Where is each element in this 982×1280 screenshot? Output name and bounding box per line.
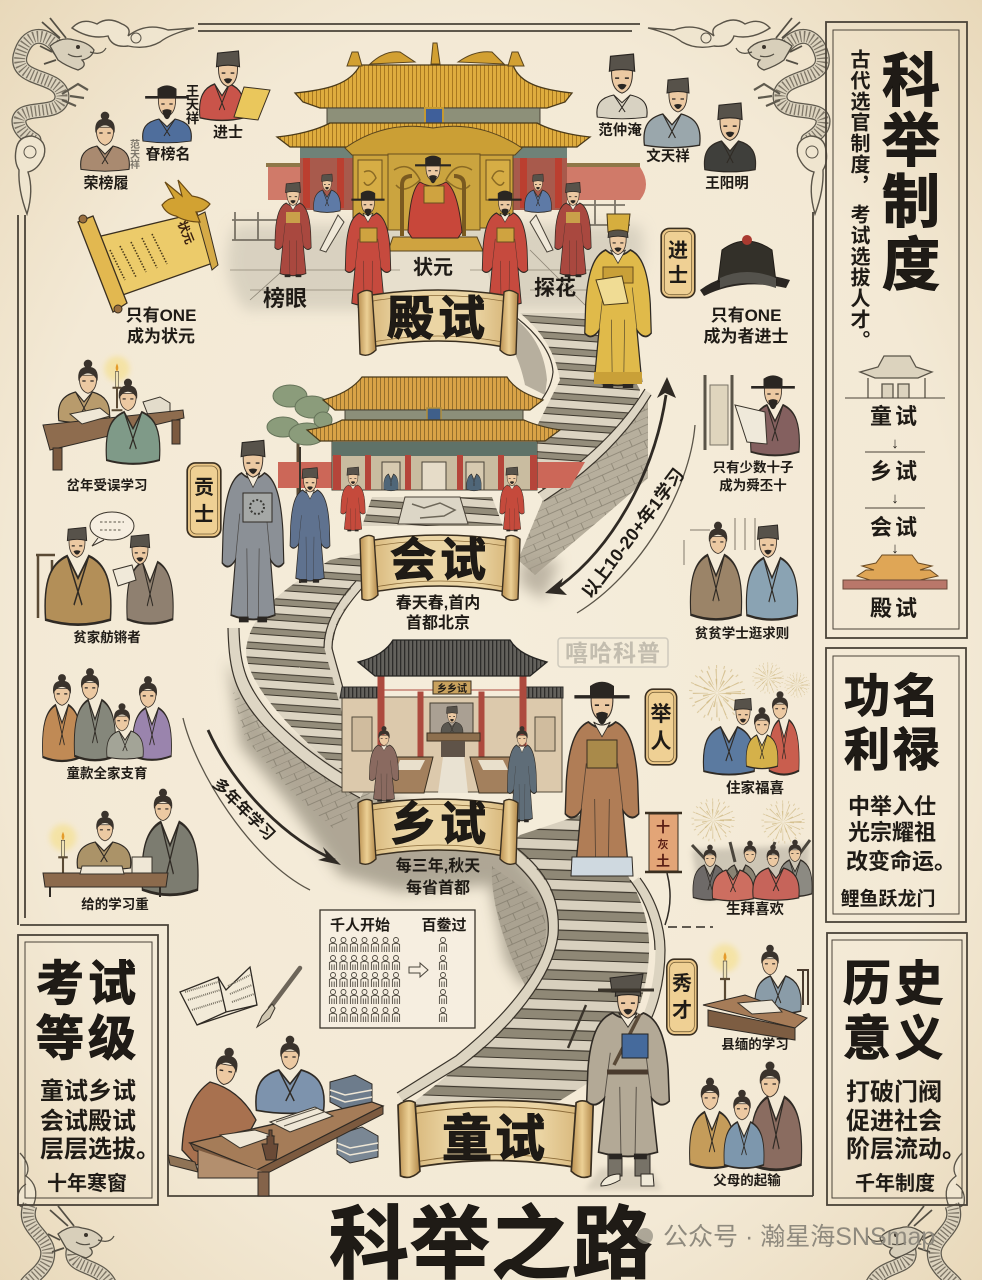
portrait: 荣榜履: 荣榜履 xyxy=(83,174,129,192)
courtyard floor xyxy=(227,225,644,310)
scroll banner: 乡试: 乡试 xyxy=(390,798,490,850)
hall labels: 榜眼 xyxy=(263,286,307,311)
red courtyard wall xyxy=(278,462,585,488)
vertical name: 范天祥: 范天祥 xyxy=(128,138,140,170)
vignette: parents with child xyxy=(690,1062,802,1188)
rank tag: 十灰土: 灰 xyxy=(658,837,668,851)
selection funnel box: 百鲞过 xyxy=(421,916,467,934)
caption: 只有ONE 成为状元: 成为状元 xyxy=(127,326,195,346)
heading: 举 xyxy=(882,109,940,174)
winding staircase with stone walls xyxy=(228,313,665,1105)
papers and ink xyxy=(220,1107,333,1148)
scroll banner: 童试 xyxy=(398,1100,593,1177)
hall labels xyxy=(263,256,576,311)
pictogram: few successful xyxy=(439,938,447,1022)
emperor xyxy=(408,156,462,238)
exam hall: 会试 xyxy=(267,377,585,531)
scroll banner: 会试: 首都北京 xyxy=(406,613,470,632)
panel: 科举制度 xyxy=(826,22,967,638)
vignette: official reading notice: 只有少数十子 xyxy=(712,459,794,475)
portrait: 进士 with document xyxy=(200,51,270,141)
panel: 功名利禄: 功名 xyxy=(844,670,942,722)
vignette: child studying with tutor xyxy=(43,789,198,912)
caption: 只有ONE 成为者进士: 成为者进士 xyxy=(704,326,788,346)
panel: 功名利禄: 中举入仕 xyxy=(848,794,936,819)
upper stairs xyxy=(520,313,640,492)
palace hall: 殿试 xyxy=(227,43,646,311)
stage flow: 殿试 xyxy=(870,596,920,621)
throne and dais xyxy=(388,237,483,251)
lower building pillars xyxy=(300,146,567,210)
panel: 历史意义: 促进社会 xyxy=(846,1108,942,1135)
middle stairs xyxy=(246,553,367,785)
vignette: family with fireworks: 住家福喜 xyxy=(726,779,784,797)
stage flow: 乡试 xyxy=(870,459,920,484)
vignette: official reading notice: 成为舜丕十 xyxy=(719,477,787,493)
vignette: parents with child: 父母的起输 xyxy=(713,1172,781,1188)
vignette: child studying with tutor: 给的学习重 xyxy=(81,896,149,912)
sign board xyxy=(433,681,471,694)
panel: 考试等级: 会试殿试 xyxy=(40,1108,136,1135)
rank tag: 十灰土: 十 xyxy=(656,819,670,835)
scroll banner: 殿试: 殿试 xyxy=(387,292,489,345)
lower roof xyxy=(277,123,590,147)
balustrades xyxy=(232,200,630,240)
rank tag: 进士 xyxy=(661,228,695,298)
exam hall: 乡试 xyxy=(340,640,563,822)
scroll banner: 会试: 春天春,首内 xyxy=(396,593,480,612)
rank tag: 举人: 人 xyxy=(650,730,672,753)
watermark: 公众号: 公众号 · 瀚星海SNSmap xyxy=(663,1223,935,1251)
icon: official winged hat xyxy=(700,235,790,296)
panel: 历史意义: 历史 xyxy=(843,958,947,1011)
stage flow: ↓ xyxy=(891,540,899,557)
blue plaque xyxy=(425,108,443,127)
gold hall icon xyxy=(843,555,947,589)
examiner alcove xyxy=(430,703,473,734)
portrait: 眘榜名: 眘榜名 xyxy=(145,145,191,163)
scroll banner: 乡试 xyxy=(358,798,518,897)
icon: writing brush xyxy=(257,968,300,1027)
portrait: 进士 with document: 进士 xyxy=(213,124,243,141)
portraits: 范仲淹 文天祥 王阳明 xyxy=(597,54,756,192)
selection funnel box: 千人开始 xyxy=(330,917,390,934)
bench xyxy=(168,1155,198,1172)
vertical intro text xyxy=(847,49,870,351)
pictogram: many candidates xyxy=(329,938,400,1022)
vignette: seated teacher and visitor: 贫家舫锵者 xyxy=(73,629,141,645)
hall outline icon xyxy=(845,356,945,398)
gongshi official in grey xyxy=(222,440,284,622)
caption: 只有ONE 成为状元: 只有ONE xyxy=(126,306,196,325)
panel: 历史意义: 阶层流动。 xyxy=(846,1136,966,1163)
stage flow: 童试 xyxy=(870,404,920,429)
vignette: poor scholar and official: 贫贫学士逛求则 xyxy=(695,625,789,641)
soldier with spear xyxy=(290,447,330,583)
panel: 考试等级: 考试 xyxy=(36,958,140,1011)
heading: 科 xyxy=(882,49,940,114)
panel: 考试等级: 等级 xyxy=(36,1013,140,1066)
vignette: poor scholar and official xyxy=(684,518,798,641)
portrait: 眘榜名 xyxy=(143,85,191,163)
blue attendants xyxy=(314,174,551,212)
students at desk xyxy=(168,1036,383,1196)
juren official in brown xyxy=(565,682,639,876)
vignette: scholars studying at table xyxy=(43,356,184,493)
panel: 考试等级: 十年寒窗 xyxy=(47,1171,127,1195)
watermark: 嘻哈科普: 嘻哈科普 xyxy=(565,640,661,666)
rank tag: 十灰土: 土 xyxy=(656,853,670,869)
heading: 度 xyxy=(882,233,940,298)
rank tag: 贡士: 贡 xyxy=(194,477,214,499)
vignette: seated teacher and visitor xyxy=(36,512,173,645)
student in brown xyxy=(182,1046,256,1165)
gold imperial scroll with dragon xyxy=(78,180,218,313)
red guards xyxy=(341,467,524,531)
scroll banner: 会试: 会试 xyxy=(390,534,490,586)
panel: 功名利禄: 光宗耀祖 xyxy=(848,820,936,845)
scroll banner: 殿试 xyxy=(358,290,518,355)
arrow: 多年年学习: 多年年学习 xyxy=(209,774,279,844)
red pillars xyxy=(378,677,526,777)
panel: 功名利禄: 鲤鱼跃龙门 xyxy=(840,888,936,910)
candidates xyxy=(369,726,537,822)
stage flow: 会试 xyxy=(870,515,920,540)
portraits: 范仲淹 文天祥 王阳明: 文天祥 xyxy=(646,147,690,165)
exam hall: 乡试: 乡乡试 xyxy=(437,682,467,695)
rank tag: 举人 xyxy=(645,689,677,765)
rank tag: 秀才: 才 xyxy=(672,999,692,1022)
scroll banner: 乡试: 每三年,秋天 xyxy=(396,856,480,875)
side wings xyxy=(342,697,562,792)
arrow: 以上10-20+年寒学习 xyxy=(545,377,695,613)
upper roof xyxy=(323,377,543,410)
vignette: county study by candle xyxy=(703,944,808,1052)
vignette: scholars studying at table: 岔年受误学习 xyxy=(66,477,148,493)
xiucai scholar xyxy=(568,974,669,1190)
pine tree xyxy=(267,385,332,520)
rank tag: 贡士 xyxy=(187,463,221,537)
panel: 功名利禄: 利禄 xyxy=(844,724,942,776)
building base xyxy=(332,440,537,490)
hall labels: 状元 xyxy=(413,256,453,279)
candidates desks xyxy=(387,757,518,793)
portraits: 范仲淹 文天祥 王阳明: 范仲淹 xyxy=(598,122,642,139)
rank tag: 秀才 xyxy=(667,959,697,1035)
arrow: 多年年学习 xyxy=(183,718,341,890)
stage flow xyxy=(865,404,925,621)
scroll banner: 童试: 童试 xyxy=(442,1111,548,1167)
stage flow: ↓ xyxy=(891,490,899,507)
lower roof xyxy=(307,420,560,441)
student in blue xyxy=(256,1036,324,1113)
vignette: family with fireworks xyxy=(691,663,809,797)
desk xyxy=(190,1102,383,1170)
arrow: 以上10-20+年寒学习: 以上10-20+年1学习 xyxy=(577,464,688,602)
vignette: family support: 童款全家支育 xyxy=(66,765,148,781)
caption: 只有ONE 成为者进士 xyxy=(704,306,788,346)
tanhua and bangyan ministers in red xyxy=(345,191,528,308)
vertical name: 王天祥: 王天祥 xyxy=(184,84,199,126)
panel: 历史意义: 意义 xyxy=(843,1013,947,1066)
heading xyxy=(882,49,940,298)
portrait: 荣榜履 xyxy=(81,112,129,192)
scroll banner: 乡试: 每省首都 xyxy=(406,878,470,897)
portraits: 范仲淹 文天祥 王阳明: 王阳明 xyxy=(705,175,749,192)
panel: 历史意义: 千年制度 xyxy=(855,1172,935,1195)
rank tag: 秀才: 秀 xyxy=(672,972,692,995)
caption: 只有ONE 成为者进士: 只有ONE xyxy=(711,306,781,325)
panel: 考试等级 xyxy=(18,935,160,1205)
stage flow: ↓ xyxy=(891,435,899,452)
rank tag: 进士: 进 xyxy=(668,239,688,262)
dashed connector xyxy=(665,873,713,927)
dark roof xyxy=(358,640,547,676)
selection funnel box xyxy=(320,910,475,1028)
rank tag: 进士: 士 xyxy=(668,264,688,287)
hall labels: 探花 xyxy=(534,277,576,300)
gold imperial scroll with dragon: 状元 xyxy=(175,218,198,246)
vignette: county study by candle: 县缅的学习 xyxy=(721,1036,789,1052)
upper roof xyxy=(295,65,572,108)
book stacks xyxy=(330,1075,378,1163)
heading: 制 xyxy=(882,170,940,235)
roof dragons finials xyxy=(347,43,524,66)
golden central screen xyxy=(345,126,522,230)
lower stairs xyxy=(410,815,649,1105)
vignette: crowd celebrating xyxy=(692,800,812,918)
panel: 功名利禄: 改变命运。 xyxy=(846,849,956,874)
scroll banner: 会试 xyxy=(360,534,520,632)
panel: 考试等级: 童试乡试 xyxy=(40,1077,136,1105)
red palace walls xyxy=(268,167,646,200)
vignette: crowd celebrating: 生拜喜欢 xyxy=(726,900,784,918)
arrow xyxy=(409,963,428,977)
vignette: official reading notice xyxy=(705,375,799,493)
panel: 历史意义: 打破门阀 xyxy=(846,1079,942,1106)
small red officials xyxy=(275,182,591,277)
rank tag: 举人: 举 xyxy=(650,703,672,726)
panel: 考试等级: 层层选拔。 xyxy=(40,1136,160,1163)
panel: 功名利禄 xyxy=(826,648,966,922)
vignette: family support xyxy=(42,668,172,781)
yellow robed jinshi official xyxy=(585,214,651,388)
panel: 历史意义 xyxy=(827,933,967,1205)
stone wall shading xyxy=(228,320,648,990)
caption: 只有ONE 成为状元 xyxy=(126,306,196,346)
rank tag: 贡士: 士 xyxy=(194,503,214,526)
vertical intro text: 古代选官制度， xyxy=(847,49,870,196)
icon: open book xyxy=(180,967,257,1025)
hall steps xyxy=(362,497,503,526)
vertical intro text: 考试选拔人才。 xyxy=(847,204,870,351)
rank tag: 十灰土 xyxy=(645,813,682,872)
